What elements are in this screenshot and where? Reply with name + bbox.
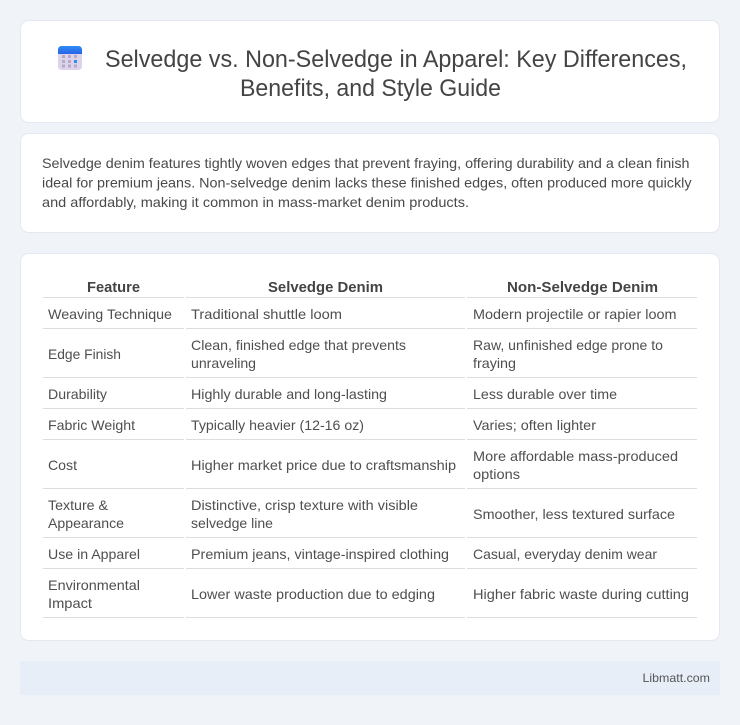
row: edge finish: unraveling xyxy=(191,355,256,371)
row: fabric weight: Typically heavier (12-16 oz) xyxy=(191,417,364,433)
row: use in apparel xyxy=(48,546,657,562)
row: fabric weight: Varies; often lighter xyxy=(473,417,596,433)
intro text: Selvedge denim features tightly woven edges that prevent fraying, offering durability and a clean finish xyxy=(42,155,690,171)
panel: introduction xyxy=(20,134,720,232)
row: texture and appearance: Appearance xyxy=(48,515,124,531)
intro text: and affordably, making it common in mass-market denim products. xyxy=(42,194,469,210)
row: texture and appearance: Texture & xyxy=(48,497,109,513)
row: use in apparel: Use in Apparel xyxy=(48,546,140,562)
row: environmental impact: Higher fabric waste during cutting xyxy=(473,586,689,602)
row: environmental impact: Environmental xyxy=(48,577,140,593)
row: edge finish: Raw, unfinished edge prone to xyxy=(473,337,663,353)
row: texture and appearance xyxy=(48,497,675,531)
row: fabric weight xyxy=(48,417,596,433)
row: texture and appearance: Smoother, less textured surface xyxy=(473,506,675,522)
row: weaving technique: Modern projectile or rapier loom xyxy=(473,306,676,322)
intro text xyxy=(42,155,692,210)
row: fabric weight: Fabric Weight xyxy=(48,417,135,433)
row: cost: Cost xyxy=(48,457,77,473)
row: environmental impact: Lower waste production due to edging xyxy=(191,586,435,602)
row: cost xyxy=(48,448,678,482)
intro text: ideal for premium jeans. Non-selvedge denim lacks these finished edges, often produced more quickly xyxy=(42,174,692,190)
title: Benefits, and Style Guide xyxy=(240,75,501,102)
title: Selvedge vs. Non-Selvedge in Apparel: Key Differences, xyxy=(105,46,687,73)
row: edge finish: Clean, finished edge that prevents xyxy=(191,337,406,353)
table header row: Selvedge Denim xyxy=(268,280,383,296)
panel: comparison table xyxy=(20,254,720,640)
footer: Libmatt.com xyxy=(642,671,710,685)
row: durability: Durability xyxy=(48,386,107,402)
panel: title header xyxy=(20,20,720,122)
row: edge finish: Edge Finish xyxy=(48,346,121,362)
table header row: Non-Selvedge Denim xyxy=(507,280,658,296)
row: environmental impact: Impact xyxy=(48,595,92,611)
row: durability xyxy=(48,386,617,402)
row: weaving technique: Traditional shuttle loom xyxy=(191,306,342,322)
row: texture and appearance: selvedge line xyxy=(191,515,273,531)
row: weaving technique: Weaving Technique xyxy=(48,306,172,322)
row: durability: Highly durable and long-lasting xyxy=(191,386,387,402)
footer xyxy=(20,661,720,695)
row: weaving technique xyxy=(48,306,676,322)
row: environmental impact xyxy=(48,577,689,611)
row: use in apparel: Casual, everyday denim wear xyxy=(473,546,657,562)
row: use in apparel: Premium jeans, vintage-inspired clothing xyxy=(191,546,449,562)
row: edge finish xyxy=(48,337,663,371)
title xyxy=(105,46,687,102)
row: durability: Less durable over time xyxy=(473,386,617,402)
row: edge finish: fraying xyxy=(473,355,516,371)
row: cost: More affordable mass-produced xyxy=(473,448,678,464)
icon: calendar xyxy=(58,46,82,70)
row: texture and appearance: Distinctive, crisp texture with visible xyxy=(191,497,418,513)
row: cost: options xyxy=(473,466,520,482)
table header row xyxy=(87,280,658,296)
table header row: Feature xyxy=(87,280,140,296)
row: cost: Higher market price due to craftsmanship xyxy=(191,457,456,473)
